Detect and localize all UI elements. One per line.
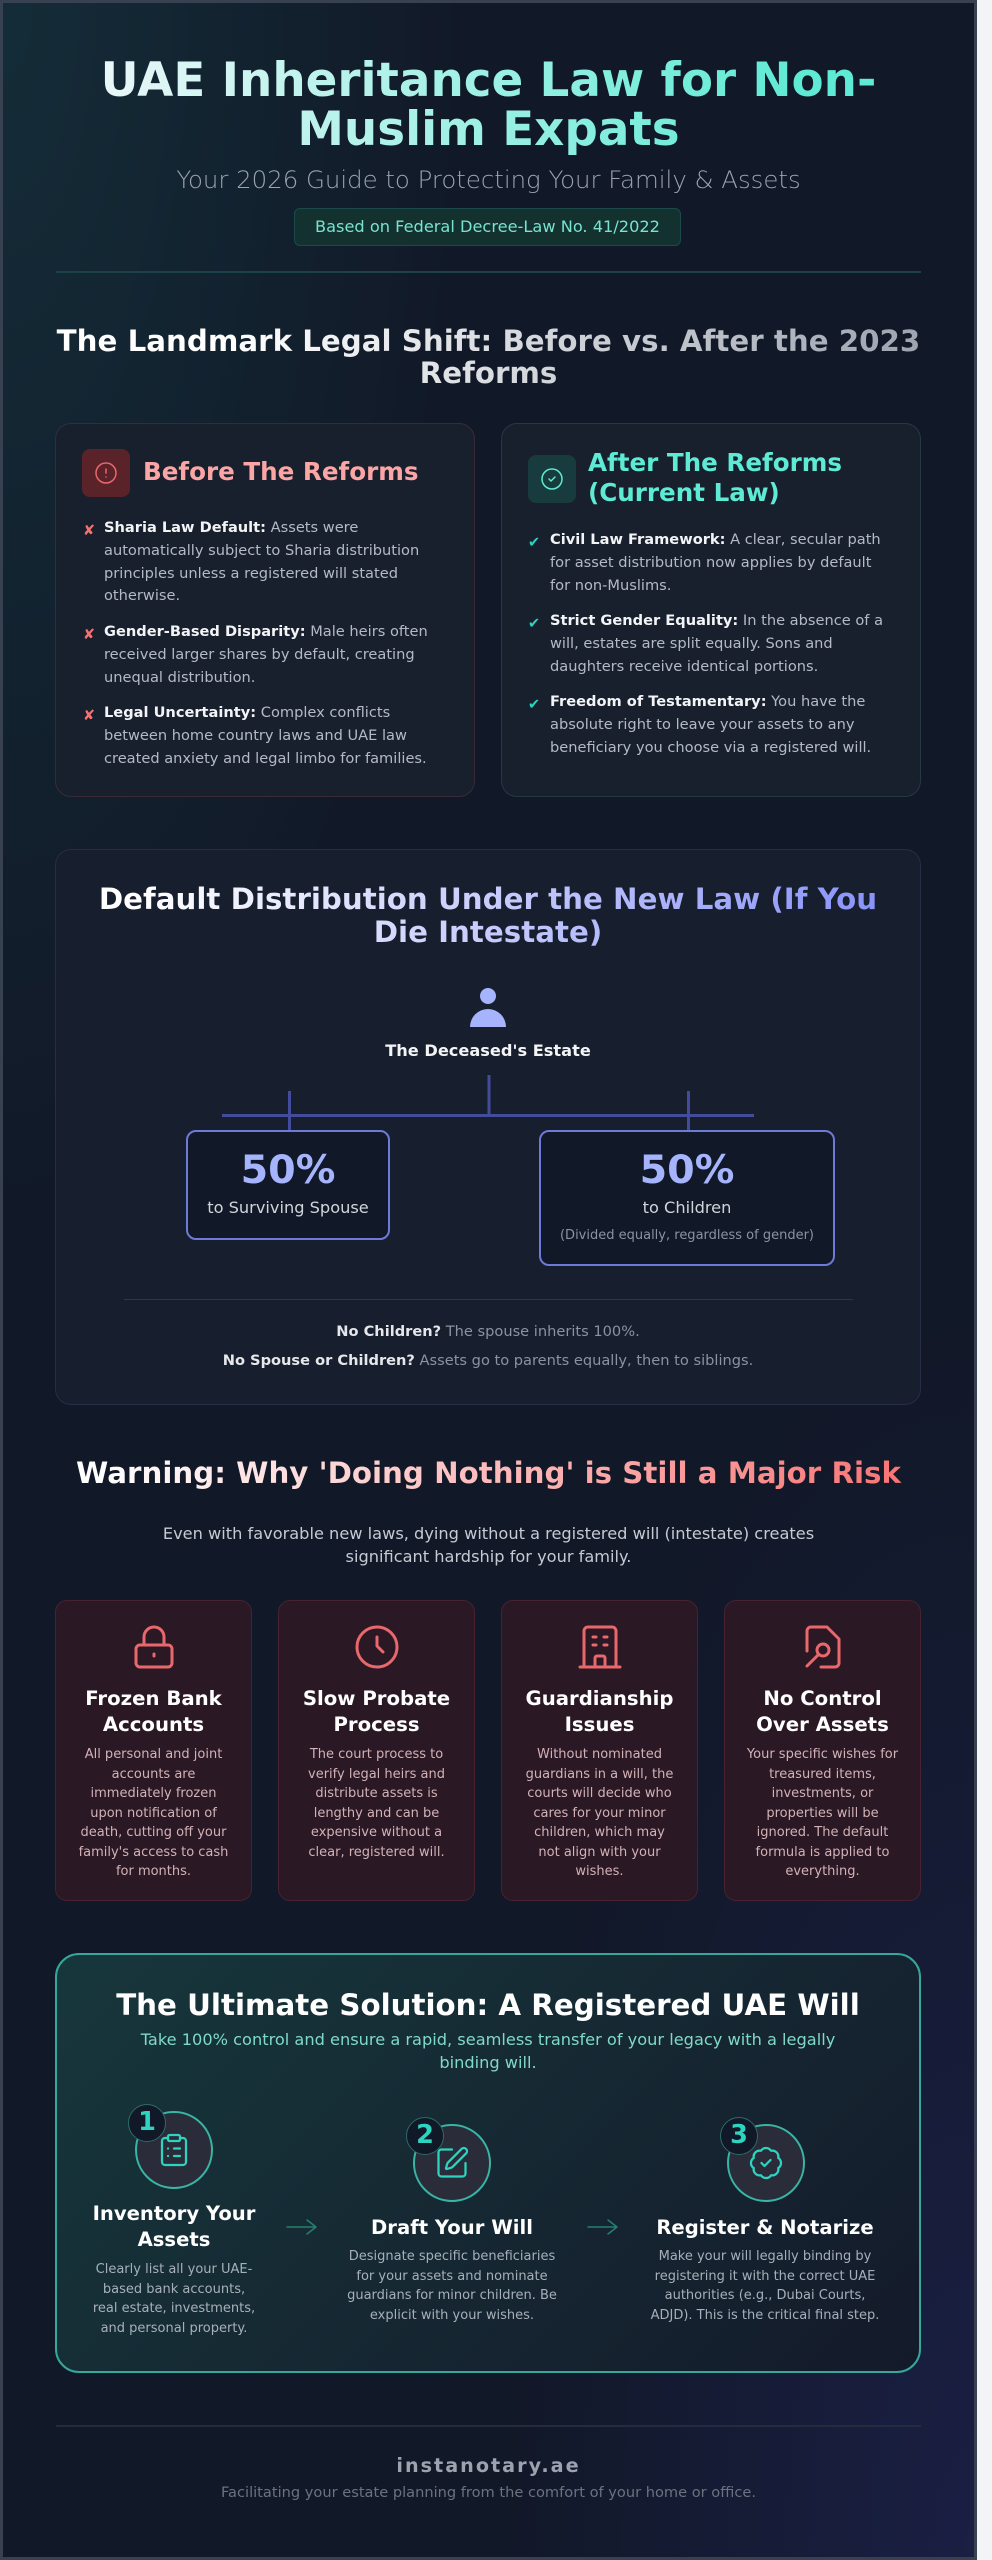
card text: Your specific wishes for: [747, 1747, 898, 1762]
panel heading: Before The Reforms: [143, 457, 419, 486]
step text: Make your will legally binding by: [659, 2249, 871, 2264]
list item: gender-based disparity: ✘: [83, 627, 95, 643]
step text: [93, 2262, 255, 2336]
list item: freedom of testamentary: ✔: [528, 697, 540, 713]
card text: guardians in a will, the: [526, 1766, 673, 1782]
card text: [746, 1747, 898, 1879]
title: UAE Inheritance Law for Non-: [101, 54, 876, 108]
subtitle: Your 2026 Guide to Protecting Your Family & Assets: [176, 165, 801, 194]
section heading: [56, 883, 920, 948]
step text: Designate specific beneficiaries: [349, 2249, 555, 2264]
warning intro text: significant hardship for your family.: [346, 1547, 631, 1566]
step 1: [93, 2104, 256, 2336]
step heading: Inventory Your: [93, 2202, 255, 2225]
step text: guardians for minor children. Be: [347, 2288, 557, 2303]
step 2: [347, 2117, 557, 2322]
card text: clear, registered will.: [308, 1844, 445, 1860]
step heading: Assets: [138, 2228, 210, 2251]
icon: alert: [82, 449, 130, 497]
list item: legal uncertainty: created anxiety and legal limbo for families.: [104, 750, 427, 767]
list item: freedom of testamentary: absolute right to leave your assets to any: [550, 716, 854, 733]
icon circle: clipboard: [135, 2111, 213, 2189]
list item: strict gender equality: [528, 612, 883, 675]
estate label: The Deceased's Estate: [385, 1041, 591, 1060]
card text: family's access to cash: [79, 1844, 228, 1860]
card text: children, which may: [534, 1825, 665, 1840]
list item: strict gender equality: Strict Gender Equality: In the absence of a: [550, 612, 883, 629]
footer tagline: Facilitating your estate planning from the comfort of your home or office.: [221, 2484, 756, 2501]
list item: strict gender equality: ✔: [528, 616, 540, 632]
card text: [78, 1747, 228, 1879]
step text: and personal property.: [101, 2320, 247, 2336]
step text: based bank accounts,: [103, 2282, 245, 2296]
section heading: Default Distribution Under the New Law (If You: [99, 882, 877, 916]
legal basis badge: [294, 208, 681, 246]
step number: 3: [730, 2120, 748, 2150]
legal basis badge: Based on Federal Decree-Law No. 41/2022: [315, 217, 660, 236]
share label: to Surviving Spouse: [207, 1198, 369, 1217]
icon: file search: [805, 1626, 840, 1668]
card text: wishes.: [575, 1864, 624, 1879]
card text: Without nominated: [537, 1747, 662, 1762]
section subtitle: [140, 2030, 835, 2072]
step text: authorities (e.g., Dubai Courts,: [665, 2288, 865, 2303]
step number: 1: [138, 2107, 156, 2137]
icon: person: [470, 988, 506, 1027]
card text: death, cutting off your: [81, 1825, 226, 1840]
step heading: Register & Notarize: [656, 2216, 874, 2239]
warning intro text: Even with favorable new laws, dying without a registered will (intestate) creates: [163, 1524, 814, 1543]
icon: check circle: [528, 455, 576, 503]
step heading: [93, 2202, 256, 2251]
step number: [128, 2104, 166, 2142]
list item: gender-based disparity: Gender-Based Disparity: Male heirs often: [104, 623, 428, 640]
list item: strict gender equality: daughters receive identical portions.: [550, 658, 818, 675]
card heading: Process: [333, 1713, 420, 1736]
list item: civil law framework: for non-Muslims.: [550, 577, 671, 594]
step text: [650, 2249, 879, 2322]
risk card: guardianship: [501, 1600, 698, 1901]
section heading: warning: Warning: Why 'Doing Nothing' is Still a Major Risk: [76, 1456, 901, 1490]
percentage: 50%: [640, 1147, 734, 1193]
list item: sharia law default: [83, 519, 419, 604]
card text: upon notification of: [90, 1806, 217, 1820]
step number: [406, 2117, 444, 2155]
step text: registering it with the correct UAE: [655, 2268, 875, 2284]
list item: freedom of testamentary: beneficiary you choose via a registered will.: [550, 739, 871, 756]
list item: freedom of testamentary: [528, 693, 871, 756]
share box: children: [539, 1130, 835, 1266]
card heading: [756, 1687, 889, 1736]
card text: treasured items,: [769, 1766, 876, 1782]
step text: ADJD). This is the critical final step.: [651, 2308, 879, 2322]
list item: civil law framework: [528, 531, 881, 594]
section subtitle: binding will.: [439, 2053, 537, 2072]
panel heading: [588, 448, 842, 507]
step heading: Draft Your Will: [371, 2216, 533, 2239]
card text: distribute assets is: [315, 1786, 438, 1801]
panel: default distribution: [55, 849, 921, 1405]
card text: All personal and joint: [85, 1747, 222, 1762]
card text: courts will decide who: [527, 1786, 672, 1801]
list item: civil law framework: Civil Law Framework: A clear, secular path: [550, 531, 881, 548]
panel heading: After The Reforms: [588, 448, 842, 477]
risk card: slow probate: [278, 1600, 475, 1901]
icon circle: badge check: [727, 2124, 805, 2202]
card heading: [303, 1687, 450, 1736]
arrow: [286, 2219, 317, 2235]
card text: The court process to: [310, 1747, 443, 1762]
share label: to Children: [643, 1198, 731, 1217]
note: no spouse or children: No Spouse or Children? Assets go to parents equally, then to siblings.: [223, 1352, 753, 1369]
list item: strict gender equality: will, estates are split equally. Sons and: [550, 635, 833, 652]
list item: legal uncertainty: Legal Uncertainty: Complex conflicts: [104, 704, 390, 721]
step text: real estate, investments,: [93, 2301, 255, 2316]
list item: civil law framework: for asset distribution now applies by default: [550, 554, 871, 571]
card text: everything.: [785, 1864, 860, 1879]
warning intro text: [163, 1524, 814, 1566]
card text: for months.: [116, 1864, 191, 1879]
card text: [526, 1747, 673, 1879]
card heading: Frozen Bank: [85, 1687, 222, 1710]
list item: sharia law default: automatically subject to Sharia distribution: [104, 542, 419, 559]
list item: legal uncertainty: [83, 704, 427, 767]
note: no children: No Children? The spouse inherits 100%.: [336, 1323, 640, 1340]
share box: spouse: [186, 1130, 390, 1240]
list item: sharia law default: principles unless a registered will stated: [104, 565, 398, 582]
list item: freedom of testamentary: Freedom of Testamentary: You have the: [550, 693, 865, 710]
card text: ignored. The default: [757, 1825, 888, 1840]
section heading: legal shift: [56, 326, 921, 389]
card heading: Accounts: [103, 1713, 204, 1736]
step number: 2: [416, 2120, 434, 2150]
card heading: Over Assets: [756, 1713, 889, 1736]
card text: expensive without a: [311, 1825, 442, 1840]
card text: immediately frozen: [91, 1786, 216, 1801]
list item: legal uncertainty: ✘: [83, 708, 95, 724]
card heading: [85, 1687, 222, 1736]
card heading: Slow Probate: [303, 1687, 450, 1710]
icon: clock: [356, 1626, 398, 1668]
icon: building: [578, 1626, 622, 1668]
risk card: frozen bank accounts: [55, 1600, 252, 1901]
list item: gender-based disparity: [83, 623, 428, 686]
card text: properties will be: [766, 1806, 879, 1820]
card text: accounts are: [112, 1766, 195, 1782]
icon: lock: [134, 1626, 174, 1668]
card text: not align with your: [538, 1844, 661, 1860]
step number: [720, 2117, 758, 2155]
list item: sharia law default: ✘: [83, 523, 95, 539]
list item: legal uncertainty: between home country laws and UAE law: [104, 727, 407, 744]
card heading: Guardianship: [526, 1687, 673, 1710]
title: Muslim Expats: [297, 103, 680, 157]
footer brand: instanotary.ae: [396, 2454, 581, 2477]
card text: verify legal heirs and: [308, 1766, 445, 1782]
list item: civil law framework: ✔: [528, 535, 540, 551]
list item: gender-based disparity: received larger shares by default, creating: [104, 646, 415, 663]
section heading: legal shift: Reforms: [420, 356, 557, 390]
title: [56, 57, 921, 155]
card text: lengthy and can be: [314, 1806, 439, 1820]
tree connector: [222, 1075, 754, 1130]
step text: [347, 2249, 557, 2322]
list item: gender-based disparity: unequal distribution.: [104, 669, 255, 686]
section heading: legal shift: The Landmark Legal Shift: Before vs. After the 2023: [57, 324, 920, 358]
card text: formula is applied to: [756, 1844, 889, 1860]
step text: explicit with your wishes.: [370, 2308, 534, 2322]
section heading: Die Intestate): [374, 914, 602, 948]
icon circle: pen: [413, 2124, 491, 2202]
card heading: No Control: [763, 1687, 882, 1710]
panel: the ultimate solution: [55, 1953, 921, 2373]
share note: (Divided equally, regardless of gender): [560, 1228, 814, 1243]
card text: investments, or: [772, 1786, 873, 1801]
arrow: [587, 2219, 618, 2235]
card text: cares for your minor: [533, 1806, 666, 1820]
risk card: no control: [724, 1600, 921, 1901]
list item: sharia law default: otherwise.: [104, 587, 180, 604]
step text: Clearly list all your UAE-: [96, 2262, 252, 2277]
card text: [308, 1747, 445, 1860]
list item: sharia law default: Sharia Law Default: Assets were: [104, 519, 358, 536]
percentage: 50%: [241, 1147, 335, 1193]
step text: for your assets and nominate: [356, 2268, 548, 2284]
card heading: Issues: [565, 1713, 634, 1736]
panel: before the reforms: [55, 423, 475, 797]
panel: after the reforms: [501, 423, 921, 797]
card heading: [526, 1687, 673, 1736]
panel heading: (Current Law): [588, 478, 780, 507]
section subtitle: Take 100% control and ensure a rapid, seamless transfer of your legacy with a legally: [141, 2030, 835, 2049]
step 3: [650, 2117, 879, 2322]
section heading: The Ultimate Solution: A Registered UAE Will: [116, 1988, 860, 2022]
